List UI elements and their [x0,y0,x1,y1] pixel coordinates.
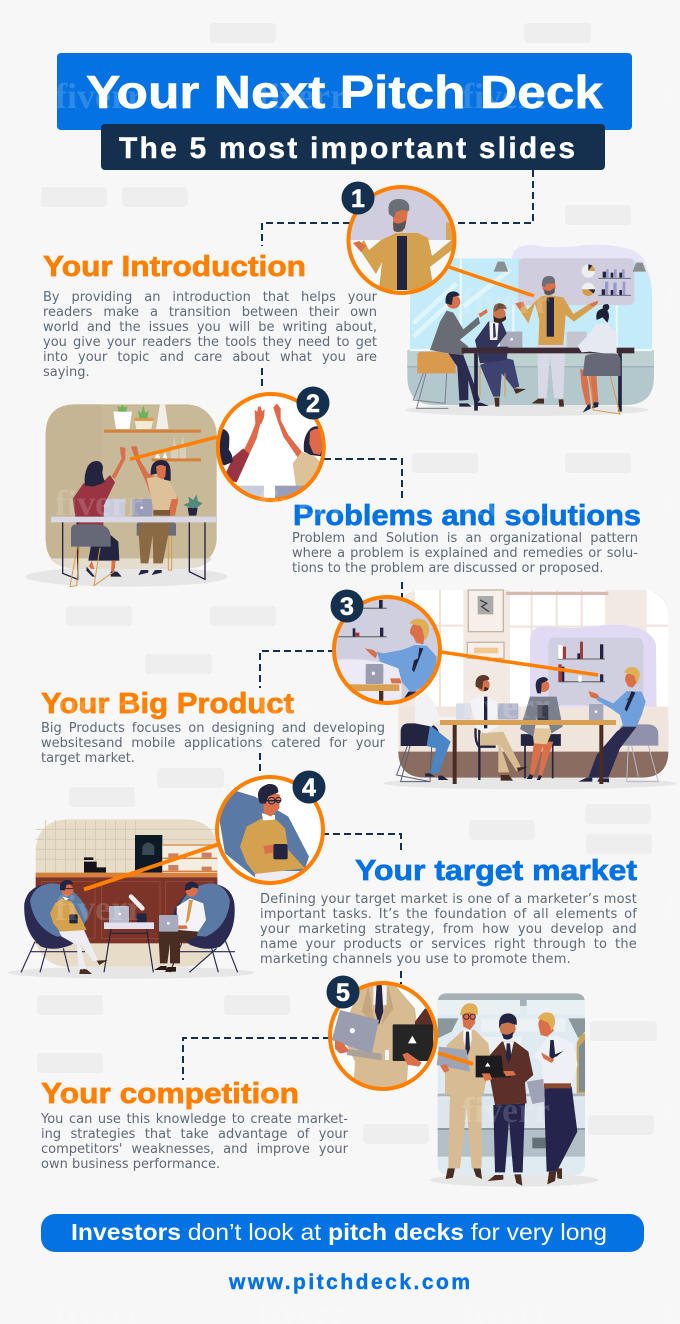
text block: target market: Defining your target market is one of a marketer’s most [260,892,637,907]
text: fiverr [462,1090,550,1130]
text block: problems and solutions: where a problem is explained and remedies or solu- [292,546,638,561]
text block: competition: ing strategies that take advantage of your [41,1127,348,1142]
text block: problems and solutions: Problem and Solution is an organizational pattern [292,531,638,546]
website url: www.pitchdeck.com [228,1271,470,1294]
presenter [515,276,598,407]
right woman [137,522,176,536]
badge 5 [326,976,360,1008]
person 1 [397,746,432,782]
text block: introduction [43,290,377,380]
table [462,348,634,353]
left chair [21,942,85,972]
heading: your introduction: Your Introduction [43,251,306,283]
right man [544,1087,577,1172]
text block: introduction: By providing an introduction that helps your [43,290,377,305]
woman [580,368,598,405]
text: fiverr [55,686,143,726]
illustration: three colleagues with laptops [430,993,598,1187]
text block: target market [260,892,638,967]
zoom circle 2 [217,394,325,502]
text block: problems and solutions: tions to the problem are discussed or proposed. [292,561,604,576]
connector: scene 3 to circle [441,652,598,675]
closing banner [41,1214,644,1252]
title banner: Your Next Pitch Deck [86,66,603,118]
text block: introduction: saying. [43,365,90,380]
text: fiverr [258,686,346,726]
text block: competition: own business performance. [41,1157,220,1172]
subtitle banner [101,124,605,170]
text: fiverr [55,483,143,523]
badge 2: 2 [306,390,320,418]
text block: introduction: world and the issues you will be writing about, [43,320,377,335]
desk [51,517,216,522]
laptops [104,499,125,517]
person 4 [627,746,658,782]
badge 3 [330,590,364,622]
text block: problems and solutions [292,531,638,576]
zoom circle 5 [330,983,438,1089]
text: fiverr [55,76,143,116]
left man [448,353,480,405]
badge 4: 4 [302,774,316,802]
text: fiverr [462,76,550,116]
zoom circle 4 [217,777,323,883]
bearded man [480,357,519,397]
text: fiverr [462,483,550,523]
badge 1: 1 [351,185,365,213]
text block: competition: You can use this knowledge to create market- [41,1112,348,1127]
text: fiverr [55,1090,143,1130]
text block: target market: marketing channels you use to promote them. [260,952,571,967]
table [440,720,616,725]
heading: your target market: Your target market [355,855,637,887]
text: fiverr [55,888,143,928]
illustration: meeting with presenter [405,245,654,416]
subtitle banner: The 5 most important slides [119,132,575,165]
badge 4 [292,770,326,804]
zoom circle 3 [333,597,440,705]
text block: introduction: you give your readers the tools they need to get [43,335,377,350]
text block: big product: target market. [41,751,135,766]
badge 1 [342,182,374,214]
dashed connector lines [183,170,533,1080]
badge 3: 3 [340,593,354,621]
right chair [170,940,238,972]
text: fiverr [258,483,346,523]
left man [448,1093,482,1168]
grey laptop [437,1047,470,1072]
text: fiverr [462,888,550,928]
text: fiverr [258,888,346,928]
right man [158,930,198,963]
left woman [112,448,125,479]
connector: scene 2 to circle [130,437,217,459]
text: fiverr [462,281,550,321]
text: fiverr [55,281,143,321]
illustration: high five at desk [26,404,228,587]
text block: big product: Big Products focuses on designing and developing [41,721,385,736]
text block: introduction: into your topic and care about what you are [43,350,377,365]
person 2 [475,728,496,780]
connector: scene 4 to circle [84,844,218,890]
text block: competition [41,1112,348,1172]
left man [59,928,98,970]
text block: target market: your marketing strategy, from how you develop and [260,922,637,937]
title banner [57,53,632,130]
text: fiverr [258,1090,346,1130]
chair [417,352,456,373]
text block: target market: important tasks. It’s the foundation of all elements of [260,907,637,922]
heading: problems and solutions: Problems and solutions [293,500,641,532]
middle man [493,1103,525,1172]
black laptop [476,1056,512,1077]
heading: your competition: Your competition [41,1078,299,1110]
chair [71,524,111,547]
zoom circle 1 [345,180,460,293]
heading: your big product: Your Big Product [41,688,294,720]
text: fiverr [258,281,346,321]
connector: scene 5 to circle [438,1053,473,1064]
laptops on table [456,703,471,719]
closing banner: Investors don’t look at pitch decks for very long [71,1219,607,1245]
table [109,906,129,922]
text block: competition: competitors' weaknesses, and improve your [41,1142,348,1157]
laptops [567,332,587,348]
person 3 [522,735,560,778]
badge 5: 5 [336,979,350,1007]
text block: introduction: readers make a transition between their own [43,305,377,320]
text block: target market: name your products or services right through to the [260,937,637,952]
illustration: team around table [383,590,677,789]
text block: big product: websitesand mobile applications catered for your [41,736,385,751]
text: fiverr [462,686,550,726]
connector: scene 1 to circle [449,267,534,296]
illustration: coffee shop chat [8,819,254,979]
text block: big product [41,721,385,766]
plant [188,508,198,516]
badge 2 [296,386,330,420]
text: fiverr [258,76,346,116]
